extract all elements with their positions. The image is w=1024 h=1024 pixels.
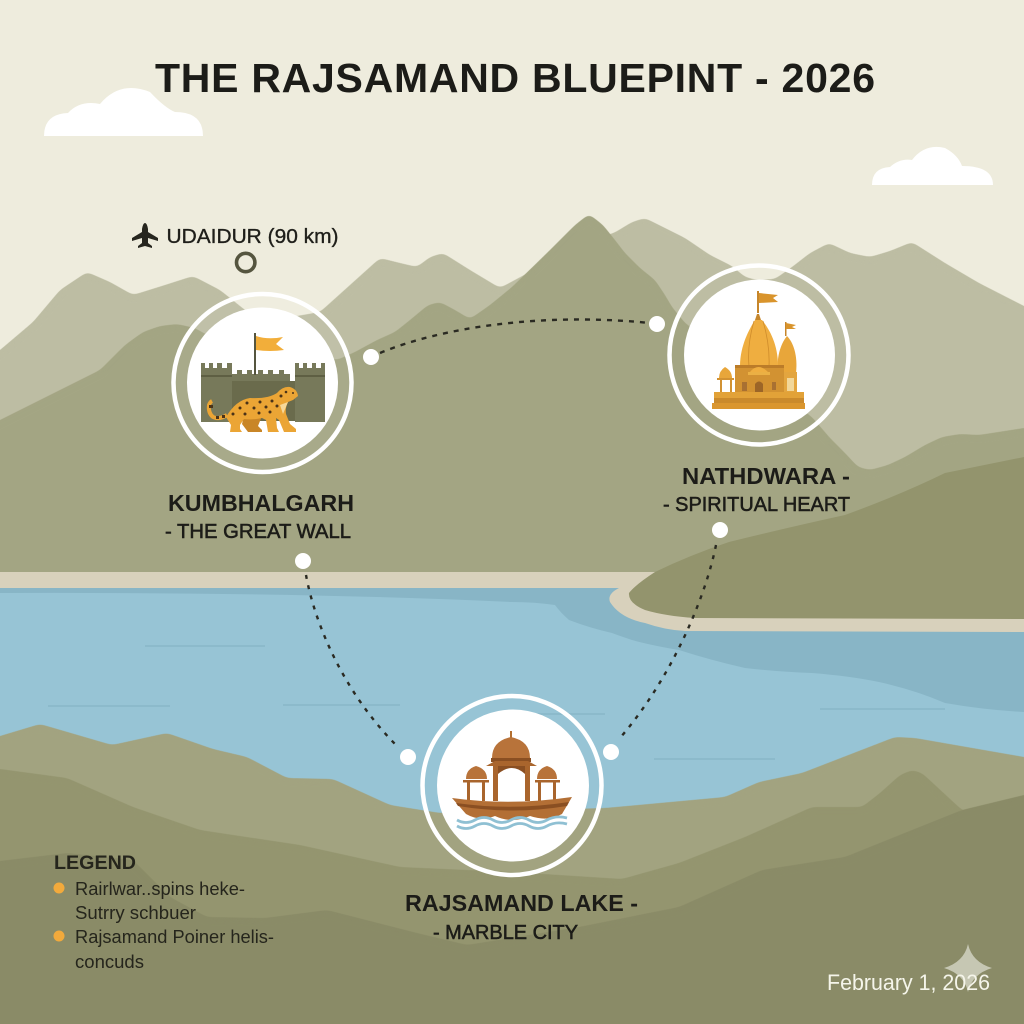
icon: fort bbox=[201, 333, 325, 422]
badge rings bbox=[174, 294, 352, 472]
date: February 1, 2026 bbox=[827, 970, 990, 995]
icon: leopard bbox=[209, 387, 298, 432]
water streaks bbox=[48, 646, 945, 759]
icon: temple bbox=[712, 291, 805, 409]
cloud right bbox=[872, 147, 993, 185]
label: Rajsamand Lake: RAJSAMAND LAKE - bbox=[405, 890, 638, 916]
panel: Nathdwara bbox=[663, 266, 850, 516]
lake darker current bbox=[0, 588, 1024, 712]
panel: Rajsamand Lake bbox=[405, 696, 638, 944]
label: Nathdwara: NATHDWARA - bbox=[682, 463, 850, 489]
legend marker 1 bbox=[54, 882, 64, 894]
label: Kumbhalgarh: KUMBHALGARH bbox=[168, 490, 354, 516]
badge rings bbox=[670, 266, 848, 444]
legend item 1: Rairlwar..spins heke- bbox=[75, 879, 245, 899]
sublabel: the great wall: - THE GREAT WALL bbox=[165, 521, 351, 543]
panel: Kumbhalgarh bbox=[165, 294, 354, 543]
foreground hills bbox=[0, 724, 1024, 1024]
icon: boat pavilion bbox=[452, 731, 572, 828]
route nodes bbox=[295, 316, 728, 765]
sublabel: marble city: - MARBLE CITY bbox=[433, 922, 578, 944]
icon: waves bbox=[457, 817, 567, 828]
airport label: UDAIDUR (90 km) bbox=[166, 225, 338, 248]
shoreline bbox=[0, 572, 680, 589]
sublabel: spiritual heart: - SPIRITUAL HEART bbox=[663, 494, 850, 516]
peninsula sand edge bbox=[609, 572, 1024, 632]
airport marker bbox=[132, 223, 338, 272]
badge rings bbox=[422, 696, 602, 875]
icon: airplane bbox=[132, 223, 158, 248]
legend item 1 continuation: Sutrry schbuer bbox=[75, 903, 196, 923]
legend bbox=[54, 853, 274, 972]
legend item 2: Rajsamand Poiner helis- bbox=[75, 927, 274, 947]
legend heading: LEGEND bbox=[54, 853, 136, 874]
icon: flag bbox=[256, 336, 284, 351]
lake bbox=[0, 588, 1024, 823]
icon: sparkle star bbox=[944, 944, 992, 992]
airport location ring bbox=[236, 253, 255, 272]
cloud left bbox=[44, 88, 203, 136]
title: THE RAJSAMAND BLUEPINT - 2026 bbox=[155, 55, 875, 101]
dotted routes bbox=[306, 319, 716, 748]
landscape background bbox=[0, 214, 1024, 1024]
peninsula bbox=[629, 457, 1024, 619]
legend marker 2 bbox=[54, 930, 64, 942]
legend item 2 continuation: concuds bbox=[75, 952, 144, 972]
